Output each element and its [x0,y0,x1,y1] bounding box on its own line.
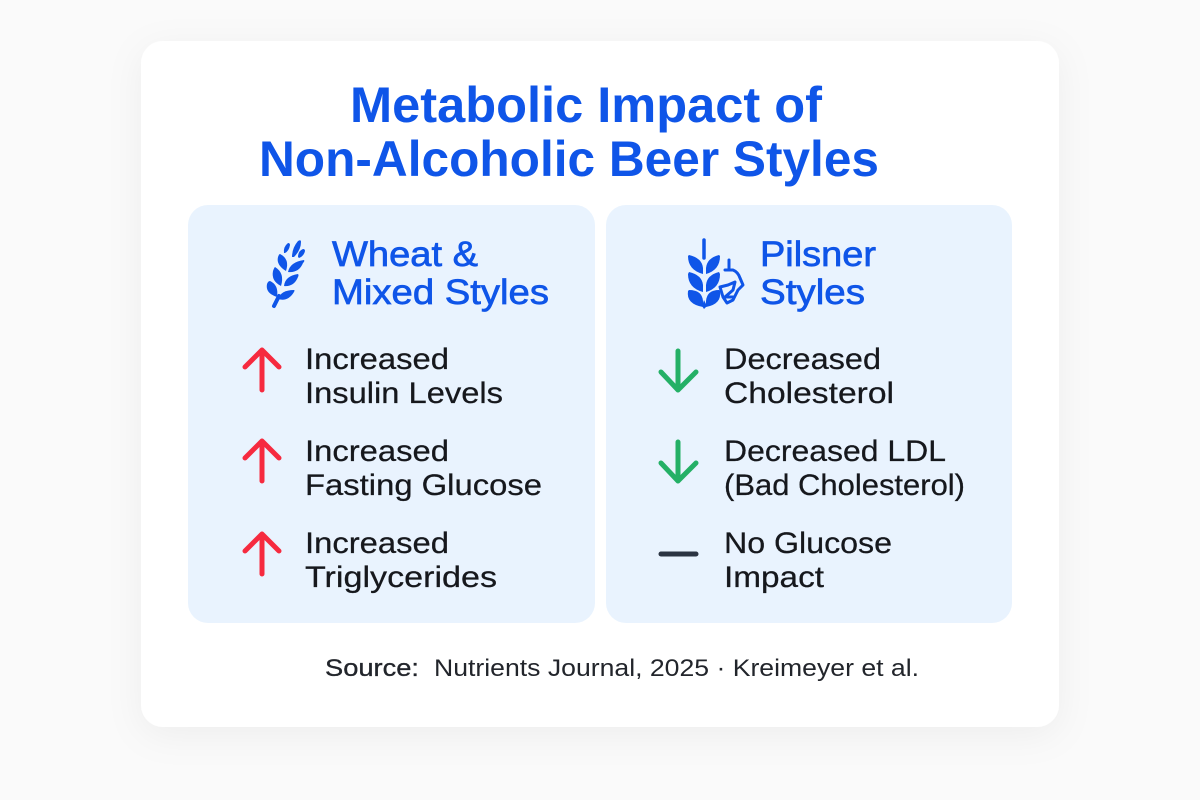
heading: pilsner styles [760,235,876,312]
item: increased fasting glucose [245,435,542,502]
item text [305,527,497,594]
title: Metabolic Impact of [350,77,822,133]
heading: wheat and mixed styles [332,235,549,312]
item text: Insulin Levels [305,377,503,410]
title: Non-Alcoholic Beer Styles [259,131,879,187]
item: decreased ldl [661,435,965,502]
icon: red up arrow [245,350,279,390]
item: no glucose impact [661,527,892,594]
item text: Increased [305,343,449,376]
item text [305,343,503,410]
item: decreased cholesterol [661,343,894,410]
item text [724,343,894,410]
item text: Triglycerides [305,561,497,594]
card [141,41,1059,727]
item text: Increased [305,435,449,468]
heading: wheat and mixed styles: Wheat & [332,235,478,274]
item: increased insulin levels [245,343,503,410]
item text: (Bad Cholesterol) [724,469,965,502]
item text: Cholesterol [724,377,894,410]
icon: barley and hop [688,240,743,309]
item text: Decreased [724,343,881,376]
heading: pilsner styles: Styles [760,273,865,312]
item text: Increased [305,527,449,560]
icon: green down arrow [661,442,696,481]
heading: pilsner styles: Pilsner [760,235,876,274]
source citation: Nutrients Journal, 2025 · Kreimeyer et al. [434,655,919,682]
icon: red up arrow [245,534,279,574]
icon: neutral dash [661,552,696,556]
item text: Fasting Glucose [305,469,542,502]
item text [305,435,542,502]
item: increased triglycerides [245,527,497,594]
item text [724,527,892,594]
item text: Impact [724,561,825,594]
icon: green down arrow [661,351,696,390]
title [259,77,879,187]
item text [724,435,965,502]
source citation: Source: [325,655,419,682]
item text: No Glucose [724,527,892,560]
heading: wheat and mixed styles: Mixed Styles [332,273,549,312]
panel: wheat and mixed styles [188,205,595,623]
icon: red up arrow [245,441,279,481]
item text: Decreased LDL [724,435,946,468]
panel background [606,205,1012,623]
panel: pilsner styles [606,205,1012,623]
icon: wheat [267,240,305,306]
panel background [188,205,595,623]
